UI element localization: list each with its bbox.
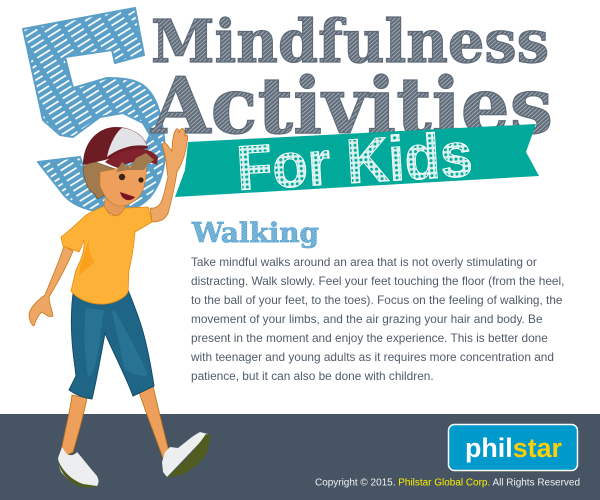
trouser shading bbox=[85, 308, 148, 376]
cap white panel bbox=[107, 128, 147, 157]
subtitle: For Kids: For Kids bbox=[235, 120, 474, 204]
philstar logo: philstar bbox=[465, 433, 562, 463]
shirt bbox=[61, 206, 152, 304]
body text: to the ball of your feet, to the toes). Focus on the feeling of walking, the bbox=[191, 293, 563, 307]
body text: movement of your limbs, and the air grazing your hair and body. Be bbox=[191, 312, 543, 326]
copyright line: Copyright © 2015. Philstar Global Corp. All Rights Reserved bbox=[315, 478, 580, 488]
left shoe sole bbox=[58, 460, 97, 488]
title: Activities: Activities bbox=[150, 61, 553, 152]
cap dome bbox=[83, 127, 148, 165]
face bbox=[100, 163, 146, 206]
body text: present in the moment and enjoy the experience. This is better done bbox=[191, 331, 548, 345]
philstar logo bbox=[448, 424, 578, 470]
body text: patience, but it can also be done with children. bbox=[191, 369, 434, 383]
back arm bbox=[29, 246, 73, 326]
left leg bbox=[62, 395, 87, 456]
ribbon banner bbox=[175, 120, 539, 204]
cap brim bbox=[105, 149, 158, 168]
eyes bbox=[119, 174, 125, 180]
trousers bbox=[69, 290, 154, 399]
neck bbox=[104, 196, 125, 215]
title: Mindfulness: Mindfulness bbox=[151, 7, 549, 76]
left shoe bbox=[58, 447, 98, 487]
shirt shading bbox=[79, 236, 95, 276]
big number 5 bbox=[23, 8, 165, 213]
footer band bbox=[0, 414, 600, 500]
heading: Walking: Walking bbox=[191, 218, 319, 249]
hair back bbox=[83, 160, 118, 199]
body text: distracting. Walk slowly. Feel your feet touching the floor (from the heel, bbox=[191, 274, 564, 288]
mouth bbox=[120, 192, 135, 200]
right shoe sole bbox=[167, 434, 211, 477]
fringe bbox=[116, 153, 154, 172]
body text bbox=[190, 255, 564, 383]
right leg bbox=[139, 386, 170, 458]
body text: Take mindful walks around an area that is not overly stimulating or bbox=[191, 255, 537, 269]
raised arm bbox=[150, 129, 188, 222]
body text: with teenager and young adults as it requires more concentration and bbox=[190, 350, 554, 364]
character: walking boy bbox=[29, 127, 211, 488]
right shoe bbox=[162, 432, 208, 477]
